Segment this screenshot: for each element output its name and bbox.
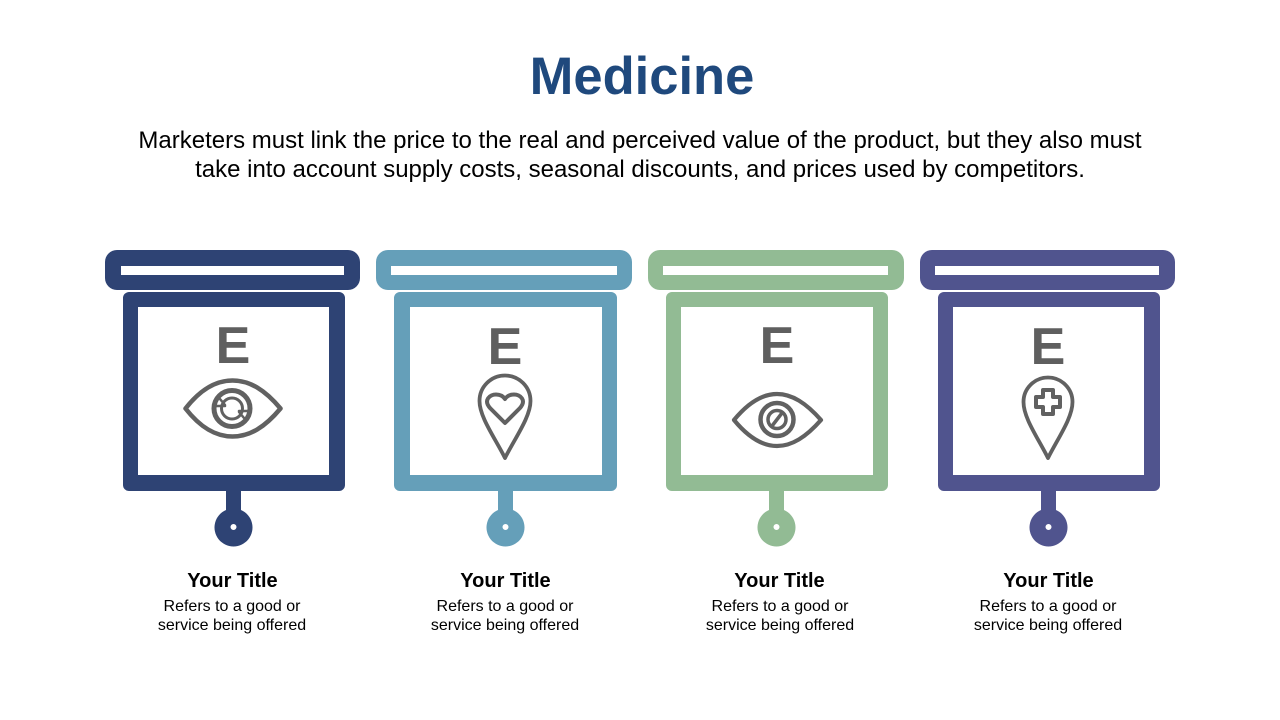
panel: projector screen 3 xyxy=(648,250,904,634)
icon: map pin with cross xyxy=(1024,378,1072,458)
caption 3: Your Title xyxy=(734,570,825,592)
panel: projector screen 4 xyxy=(920,250,1175,634)
pull cord 2 xyxy=(486,490,524,546)
intro paragraph: take into account supply costs, seasonal discounts, and prices used by competitors. xyxy=(195,156,1085,183)
caption 3 xyxy=(706,570,854,634)
panel: projector screen 1 xyxy=(105,250,360,634)
screen frame 2 xyxy=(394,292,617,491)
caption 1: Refers to a good or xyxy=(164,598,301,615)
caption 2 xyxy=(431,570,579,634)
caption 1: service being offered xyxy=(158,617,306,634)
intro paragraph xyxy=(138,127,1142,183)
intro paragraph: Marketers must link the price to the real and perceived value of the product, but they also must xyxy=(138,127,1142,154)
caption 4: Refers to a good or xyxy=(980,598,1117,615)
letter 3: E xyxy=(760,317,794,375)
pull cord 4 xyxy=(1030,490,1068,546)
caption 3: service being offered xyxy=(706,617,854,634)
pull cord 1 xyxy=(214,490,252,546)
screen roller 1 xyxy=(105,250,360,290)
caption 3: Refers to a good or xyxy=(712,598,849,615)
pull cord 3 xyxy=(758,490,796,546)
caption 4: Your Title xyxy=(1003,570,1094,592)
caption 2: Refers to a good or xyxy=(437,598,574,615)
caption 4: service being offered xyxy=(974,617,1122,634)
screen roller 2 xyxy=(376,250,632,290)
icon: map pin with heart xyxy=(480,376,530,458)
icon: eye with pill xyxy=(734,394,821,446)
icon: eye with arrows xyxy=(186,380,280,436)
screen roller 4 xyxy=(920,250,1175,290)
screen roller 3 xyxy=(648,250,904,290)
letter 2: E xyxy=(488,318,522,376)
caption 1: Your Title xyxy=(187,570,278,592)
caption 1 xyxy=(158,570,306,634)
letter 1: E xyxy=(216,317,250,375)
caption 2: service being offered xyxy=(431,617,579,634)
letter 4: E xyxy=(1031,318,1065,376)
title: Medicine xyxy=(530,47,754,106)
caption 2: Your Title xyxy=(460,570,551,592)
screen frame 4 xyxy=(938,292,1160,491)
caption 4 xyxy=(974,570,1122,634)
screen frame 3 xyxy=(666,292,888,491)
screen frame 1 xyxy=(123,292,345,491)
panel: projector screen 2 xyxy=(376,250,632,634)
